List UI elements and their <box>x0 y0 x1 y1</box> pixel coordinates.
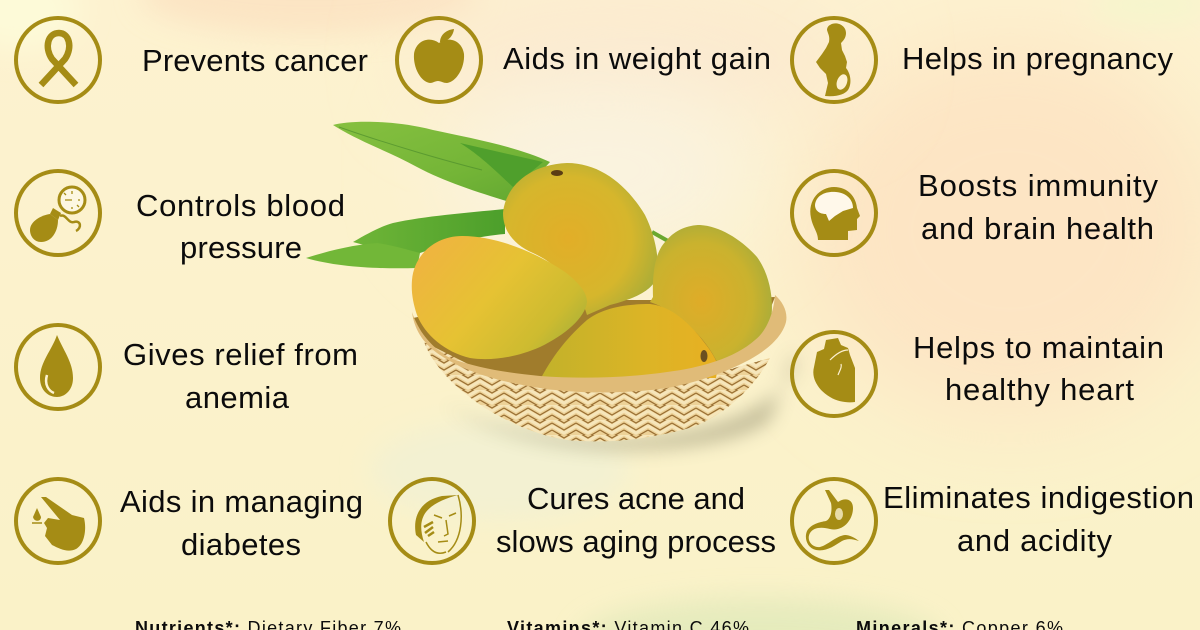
benefit: pregnancy <box>792 18 1174 102</box>
mango: bottom <box>541 304 718 378</box>
icon: face <box>390 479 474 563</box>
icon: stomach <box>792 479 876 563</box>
benefit: diabetes <box>16 479 363 563</box>
basket front rim <box>412 295 786 392</box>
label: Helps in pregnancy <box>902 41 1174 76</box>
benefit: indigestion and acidity: and acidity <box>957 523 1112 558</box>
benefit: healthy heart <box>792 330 1164 416</box>
benefit: healthy heart: healthy heart <box>945 372 1134 407</box>
label: Gives relief from <box>123 337 358 372</box>
icon: finger prick <box>16 479 100 563</box>
label: Cures acne and <box>527 481 745 516</box>
basket shadow <box>440 350 796 450</box>
benefit: immunity and brain <box>792 168 1158 255</box>
icon: anatomical heart <box>792 332 876 416</box>
mango: left <box>412 236 587 359</box>
icon: ribbon <box>16 18 100 102</box>
benefit: indigestion and acidity <box>792 479 1194 563</box>
benefit: acne and aging <box>390 479 776 563</box>
icon: head with brain <box>792 171 876 255</box>
benefit: diabetes: diabetes <box>181 527 301 562</box>
benefit: acne and aging: slows aging process <box>496 524 776 559</box>
leaves <box>306 122 668 268</box>
benefit: anemia: anemia <box>185 380 290 415</box>
icon: blood pressure cuff <box>16 171 100 255</box>
label: Aids in managing <box>120 484 363 519</box>
label: Boosts immunity <box>918 168 1158 203</box>
icon: pregnant woman <box>792 18 876 102</box>
benefit: weight gain <box>397 18 771 102</box>
icon: blood drop <box>16 325 100 409</box>
basket interior <box>413 297 775 392</box>
mango: top <box>503 163 658 315</box>
benefit: immunity and brain: and brain health <box>921 211 1154 246</box>
label: Eliminates indigestion <box>883 480 1194 515</box>
benefit: prevents cancer <box>16 18 368 102</box>
basket bowl weave <box>424 342 770 441</box>
mango bowl illustration <box>306 122 796 450</box>
label: Helps to maintain <box>913 330 1164 365</box>
label: Controls blood <box>136 188 345 223</box>
benefit: anemia <box>16 325 358 415</box>
icon: apple <box>397 18 481 102</box>
label: Aids in weight gain <box>503 41 771 76</box>
benefit: blood pressure <box>16 171 345 265</box>
label: Prevents cancer <box>142 43 368 78</box>
mango: right <box>650 225 772 364</box>
benefit: blood pressure: pressure <box>180 230 302 265</box>
